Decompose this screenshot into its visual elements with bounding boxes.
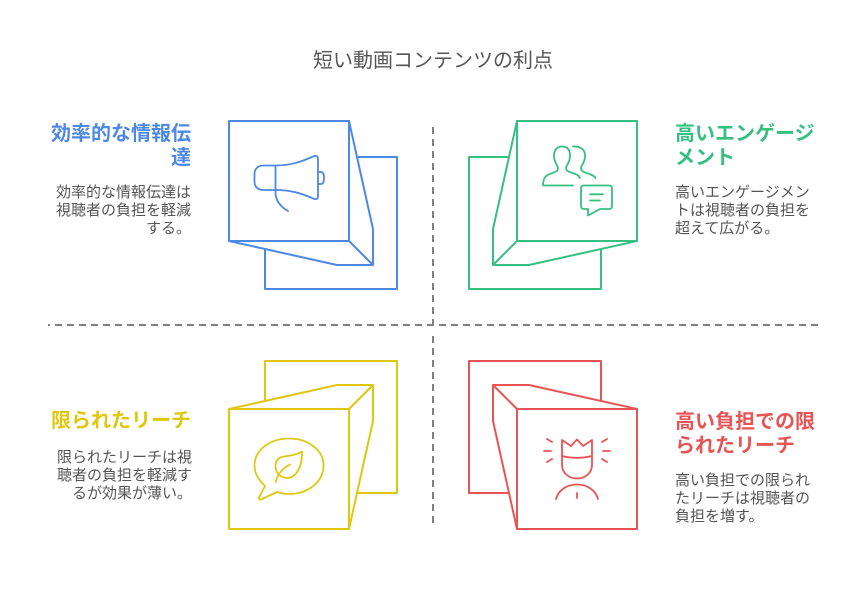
panel: blue folded square: [229, 121, 397, 289]
text: high burden limited reach: たリーチは視聴者の: [675, 490, 810, 507]
heading: high burden limited reach: [675, 410, 815, 457]
heading: efficient information: 効率的な情報伝: [51, 123, 191, 145]
icon: distressed person with crown: [544, 439, 610, 499]
panel: green folded square: [469, 121, 637, 289]
icon: leaf in speech bubble: [254, 438, 324, 500]
text: high burden limited reach: 高い負担での限られ: [675, 472, 810, 489]
text: limited reach: [57, 449, 192, 502]
title: 短い動画コンテンツの利点: [313, 50, 553, 72]
text: high engagement: 高いエンゲージメン: [675, 184, 810, 201]
heading: high engagement: 高いエンゲージ: [675, 123, 815, 145]
heading: efficient information: 達: [171, 147, 191, 169]
text: efficient information: 効率的な情報伝達は: [56, 184, 191, 201]
text: high burden limited reach: 負担を増す。: [675, 508, 764, 525]
panel: red folded square: [469, 361, 637, 529]
text: high engagement: [675, 184, 810, 237]
text: efficient information: 視聴者の負担を軽減: [56, 202, 191, 219]
heading: high burden limited reach: 高い負担での限: [675, 411, 815, 433]
heading: high burden limited reach: られたリーチ: [675, 435, 795, 457]
icon: megaphone: [254, 156, 324, 211]
heading: efficient information: [51, 122, 191, 169]
text: high engagement: 超えて広がる。: [675, 220, 779, 237]
text: limited reach: 聴者の負担を軽減す: [57, 467, 192, 484]
text: efficient information: [56, 184, 191, 237]
panel: yellow folded square: [229, 361, 397, 529]
text: limited reach: 限られたリーチは視: [57, 449, 192, 466]
heading: high engagement: メント: [675, 147, 735, 169]
text: high burden limited reach: [675, 472, 810, 525]
text: limited reach: るが効果が薄い。: [72, 485, 192, 502]
text: high engagement: トは視聴者の負担を: [675, 202, 810, 219]
icon: people with speech bubble: [543, 146, 612, 216]
heading: high engagement: [675, 122, 815, 169]
heading: limited reach: 限られたリーチ: [51, 410, 191, 432]
text: efficient information: する。: [146, 220, 191, 237]
